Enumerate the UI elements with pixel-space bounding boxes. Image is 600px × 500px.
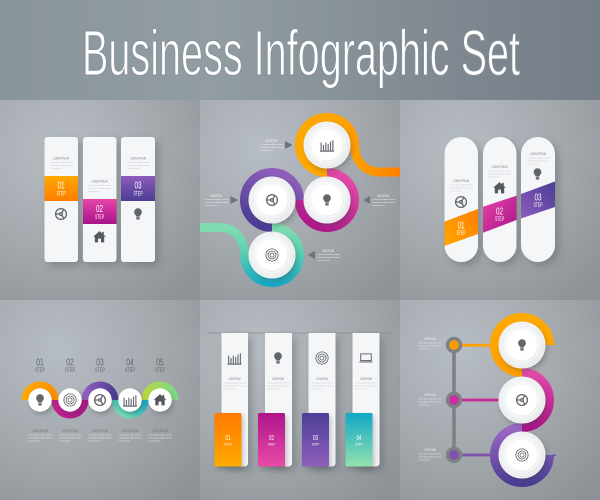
tab 1: Lorem ipsum — [224, 388, 236, 390]
tab 3: STEP — [312, 442, 320, 446]
node: purple — [418, 448, 460, 462]
arrow and text: bottom: Lorem ipsum dolor sit amet — [317, 253, 340, 256]
pill 3 — [521, 137, 555, 262]
panel: pill cards with slanted bands — [400, 100, 600, 300]
arrow and text: top: Lorem ipsum dolor sit amet — [260, 146, 283, 149]
step 5: Lorem ipsum dolor sit amet — [148, 436, 172, 440]
step 5: Lorem ipsum — [148, 440, 161, 442]
step disc: wheel — [498, 376, 546, 424]
step 2: Lorem ipsum — [58, 440, 71, 442]
step 1: Lorem ipsum — [28, 440, 41, 442]
step 3: Lorem ipsum dolor sit amet — [88, 436, 112, 440]
timeline spine — [452, 345, 456, 455]
arrow and text: top: Lorem ipsum — [260, 149, 273, 152]
tab 4 — [346, 333, 380, 467]
node: orange: Lorem ipsum dolor sit amet — [418, 344, 441, 348]
ribbon: purple — [494, 428, 550, 482]
pill 2: 02 — [496, 206, 503, 218]
card 1: LOEM IPSUM — [53, 156, 69, 160]
tab 2 — [258, 333, 292, 467]
card 2: 02 — [96, 203, 103, 215]
card 2: Lorem ipsum dolor sit amet — [88, 187, 111, 190]
card 2: Lorem ipsum dolor sit amet — [88, 184, 111, 187]
ribbon tails — [553, 344, 556, 456]
step 2: LOEM IPSUM — [62, 429, 78, 433]
pill 2: STEP — [495, 217, 504, 223]
tab 4: LOEM IPSUM — [360, 377, 372, 381]
step 1 — [28, 358, 52, 442]
step 4: Lorem ipsum dolor sit amet — [118, 434, 142, 436]
pill 1: Lorem ipsum dolor sit amet — [450, 186, 473, 190]
ribbon: orange — [299, 117, 400, 172]
tab 2: STEP — [268, 442, 276, 446]
step 1: 01 — [36, 358, 44, 368]
pill 2: Lorem ipsum dolor sit amet — [488, 172, 511, 176]
tab 2: Lorem ipsum dolor sit amet — [267, 382, 290, 384]
tab 3 — [302, 333, 336, 467]
tab 1: 01 — [226, 435, 231, 442]
card 3: STEP — [134, 192, 142, 198]
card 1: Lorem ipsum dolor sit amet — [50, 164, 73, 167]
arrow and text: left — [205, 194, 238, 207]
tab 1: Lorem ipsum dolor sit amet — [224, 384, 247, 388]
node: orange: LOEM IPSUM — [424, 337, 436, 341]
tab 1: STEP — [224, 442, 232, 446]
step 4 — [118, 358, 142, 442]
card 3: LOEM IPSUM — [130, 156, 146, 160]
tab 2: Lorem ipsum dolor sit amet — [267, 384, 290, 388]
arrow and text: left: Lorem ipsum dolor sit amet — [205, 198, 228, 201]
step 3 — [88, 358, 112, 442]
tab 3: Lorem ipsum — [310, 388, 323, 390]
step 1: Lorem ipsum dolor sit amet — [28, 436, 52, 440]
arrow and text: right: Lorem ipsum dolor sit amet — [372, 198, 395, 201]
card 2: STEP — [95, 215, 104, 221]
step 2 — [58, 358, 82, 442]
step 2: 02 — [66, 358, 74, 368]
arrow and text: left: LOEM IPSUM — [210, 194, 222, 198]
ribbon: orange — [494, 318, 550, 372]
arrow and text: right: Lorem ipsum — [372, 204, 385, 207]
arrow and text: top — [260, 139, 292, 152]
step disc: wheel — [248, 176, 296, 224]
pill 3: LOEM IPSUM — [530, 152, 546, 156]
step 3: LOEM IPSUM — [92, 429, 108, 433]
step 3: 03 — [96, 358, 104, 368]
step 1: Lorem ipsum dolor sit amet — [28, 434, 52, 436]
step 1: LOEM IPSUM — [32, 429, 48, 433]
node: magenta — [418, 393, 460, 406]
step 2: Lorem ipsum dolor sit amet — [58, 434, 82, 436]
card 3: Lorem ipsum dolor sit amet — [127, 161, 150, 164]
step 5: STEP — [155, 368, 165, 374]
tab 3: 03 — [313, 435, 318, 442]
tab 4: Lorem ipsum dolor sit amet — [354, 382, 378, 384]
card 1 — [44, 137, 78, 262]
pill 2: Lorem ipsum — [488, 176, 500, 178]
pill 1: LOEM IPSUM — [453, 179, 469, 183]
card 3: Lorem ipsum dolor sit amet — [127, 164, 150, 167]
tab 1 — [214, 333, 248, 467]
panel: vertical timeline circles — [400, 300, 600, 500]
step 3: Lorem ipsum — [88, 440, 101, 442]
card 3 — [121, 137, 155, 262]
tab 2: 02 — [269, 435, 274, 442]
step 4: Lorem ipsum dolor sit amet — [118, 436, 142, 440]
panel: hanging tabs — [200, 300, 400, 500]
ribbon: purple — [244, 172, 300, 228]
pill 2: LOEM IPSUM — [492, 165, 508, 169]
pill 3: Lorem ipsum — [526, 162, 539, 166]
step disc: chart — [304, 122, 350, 168]
pill 3: 03 — [534, 192, 542, 204]
arrow and text: bottom: LOEM IPSUM — [322, 249, 334, 253]
pill 1: 01 — [458, 220, 465, 232]
node: magenta: Lorem ipsum — [418, 404, 430, 406]
card 1: STEP — [56, 192, 66, 198]
step 5: Lorem ipsum dolor sit amet — [148, 434, 172, 436]
step 2: STEP — [65, 368, 75, 374]
node: purple: Lorem ipsum dolor sit amet — [418, 452, 441, 456]
ribbon: magenta — [522, 372, 550, 428]
step disc: bulb — [304, 176, 350, 224]
card 1: Lorem ipsum dolor sit amet — [50, 161, 73, 164]
tab 3: Lorem ipsum dolor sit amet — [310, 382, 334, 384]
tab 4: Lorem ipsum — [354, 388, 367, 390]
connector lines — [454, 344, 500, 456]
node: purple: Lorem ipsum — [418, 458, 430, 462]
arrow and text: bottom: Lorem ipsum — [317, 259, 330, 262]
panel: serpentine circles — [200, 100, 400, 300]
node: magenta: LOEM IPSUM — [424, 393, 436, 397]
node: magenta: Lorem ipsum dolor sit amet — [418, 400, 441, 404]
pill 2: Lorem ipsum dolor sit amet — [488, 170, 511, 172]
tab 2: Lorem ipsum — [267, 388, 279, 390]
step 4: STEP — [125, 368, 135, 374]
arrow and text: top: Lorem ipsum dolor sit amet — [260, 143, 283, 146]
node: purple: LOEM IPSUM — [424, 448, 436, 452]
tab 4: STEP — [355, 442, 363, 446]
panel: five step wave — [0, 300, 200, 500]
pill 3: Lorem ipsum dolor sit amet — [526, 160, 550, 162]
tab 2: LOEM IPSUM — [272, 377, 284, 381]
step 2: Lorem ipsum dolor sit amet — [58, 436, 82, 440]
step 5: LOEM IPSUM — [152, 429, 168, 433]
panel: three step cards — [0, 100, 200, 300]
arrow and text: left: Lorem ipsum dolor sit amet — [205, 201, 228, 204]
step 3: STEP — [95, 368, 105, 374]
arrow and text: top: LOEM IPSUM — [265, 139, 277, 143]
arrow and text: right — [363, 194, 395, 207]
card 2: Lorem ipsum — [88, 190, 100, 193]
step disc: target — [498, 432, 546, 478]
step 3: Lorem ipsum dolor sit amet — [88, 434, 112, 436]
pill 2 — [483, 137, 516, 262]
title banner — [0, 0, 600, 100]
card 2: LOEM IPSUM — [92, 180, 108, 184]
arrow and text: bottom — [308, 249, 340, 262]
tab 1: LOEM IPSUM — [228, 377, 241, 381]
arrow and text: right: Lorem ipsum dolor sit amet — [372, 201, 395, 204]
tab 1: Lorem ipsum dolor sit amet — [224, 382, 247, 384]
pill 3: STEP — [534, 203, 542, 209]
step 4: Lorem ipsum — [118, 440, 131, 442]
step 1: STEP — [35, 368, 45, 374]
wave arcs — [25, 385, 175, 415]
pill 1: Lorem ipsum — [450, 190, 462, 192]
tab 3: Lorem ipsum dolor sit amet — [310, 384, 334, 388]
pill 1: STEP — [456, 231, 466, 237]
arrow and text: bottom: Lorem ipsum dolor sit amet — [317, 256, 340, 259]
card 1: 01 — [58, 180, 65, 192]
node: magenta: Lorem ipsum dolor sit amet — [418, 398, 441, 400]
step disc: target — [248, 232, 296, 278]
card 1: Lorem ipsum — [50, 167, 62, 170]
card 2 — [83, 137, 116, 262]
pill 1: Lorem ipsum dolor sit amet — [450, 184, 473, 186]
pill 3: Lorem ipsum dolor sit amet — [526, 156, 550, 160]
tab 4: Lorem ipsum dolor sit amet — [354, 384, 378, 388]
step 4: 04 — [126, 358, 134, 368]
arrow and text: left: Lorem ipsum — [205, 204, 218, 207]
tab 4: 04 — [356, 435, 362, 442]
arrow and text: right: LOEM IPSUM — [377, 194, 389, 198]
tab 3: LOEM IPSUM — [316, 377, 328, 381]
node: purple: Lorem ipsum dolor sit amet — [418, 456, 441, 458]
node: orange: Lorem ipsum dolor sit amet — [418, 342, 441, 344]
step 4: LOEM IPSUM — [122, 429, 138, 433]
step 5 — [148, 358, 172, 442]
ribbon: green — [200, 228, 300, 282]
card 3: Lorem ipsum — [127, 167, 139, 170]
step disc: bulb — [498, 322, 546, 368]
node: orange: Lorem ipsum — [418, 348, 430, 350]
node: orange — [418, 337, 460, 352]
ribbon: magenta — [300, 172, 354, 228]
pill 1 — [444, 137, 478, 262]
card 3: 03 — [134, 180, 142, 192]
step 5: 05 — [156, 358, 164, 368]
